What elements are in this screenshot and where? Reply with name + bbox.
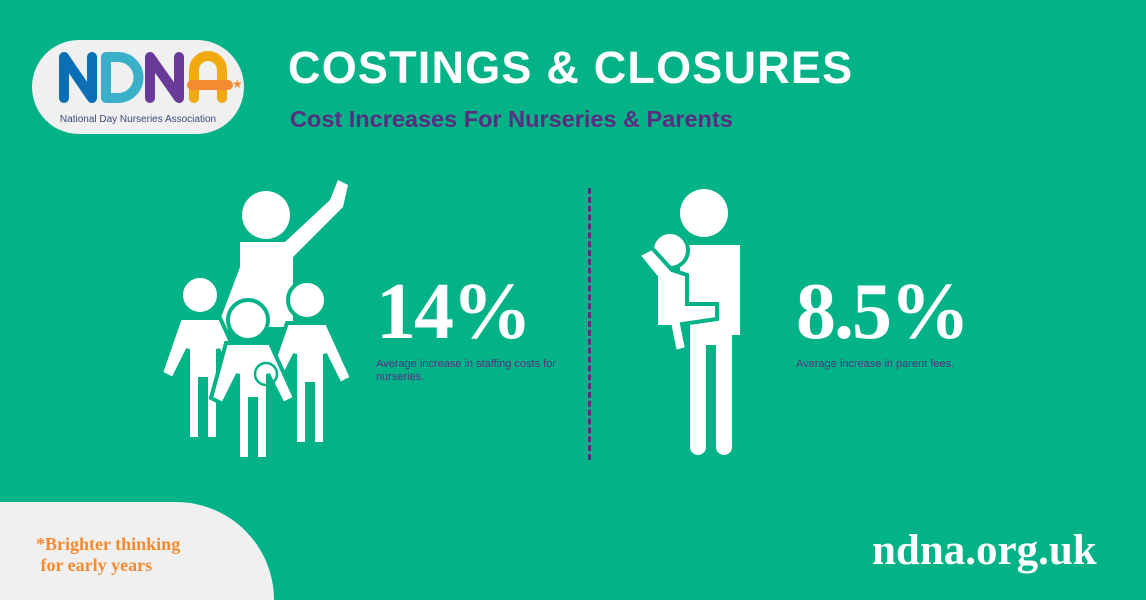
divider [588,188,591,460]
stat: 14%: Average increase in staffing costs for nurseries. [376,358,556,383]
stat: 8.5%: 8.5% [796,268,968,356]
logo [32,40,244,134]
website: ndna.org.uk [872,527,1097,574]
logo: ★ [232,77,243,91]
stat: 14%: 14% [376,268,530,356]
footer tagline panel [0,502,274,600]
icon: parent with baby [641,189,740,455]
stat: 14% [376,268,556,383]
subtitle: Cost Increases For Nurseries & Parents [290,106,733,132]
icon: adult with children [164,180,350,457]
logo: National Day Nurseries Association [60,114,216,125]
footer tagline panel: *Brighter thinking [36,534,180,554]
footer tagline panel: for early years [40,555,152,575]
stat: 8.5%: Average increase in parent fees. [796,358,954,370]
title: COSTINGS & CLOSURES [288,42,853,93]
